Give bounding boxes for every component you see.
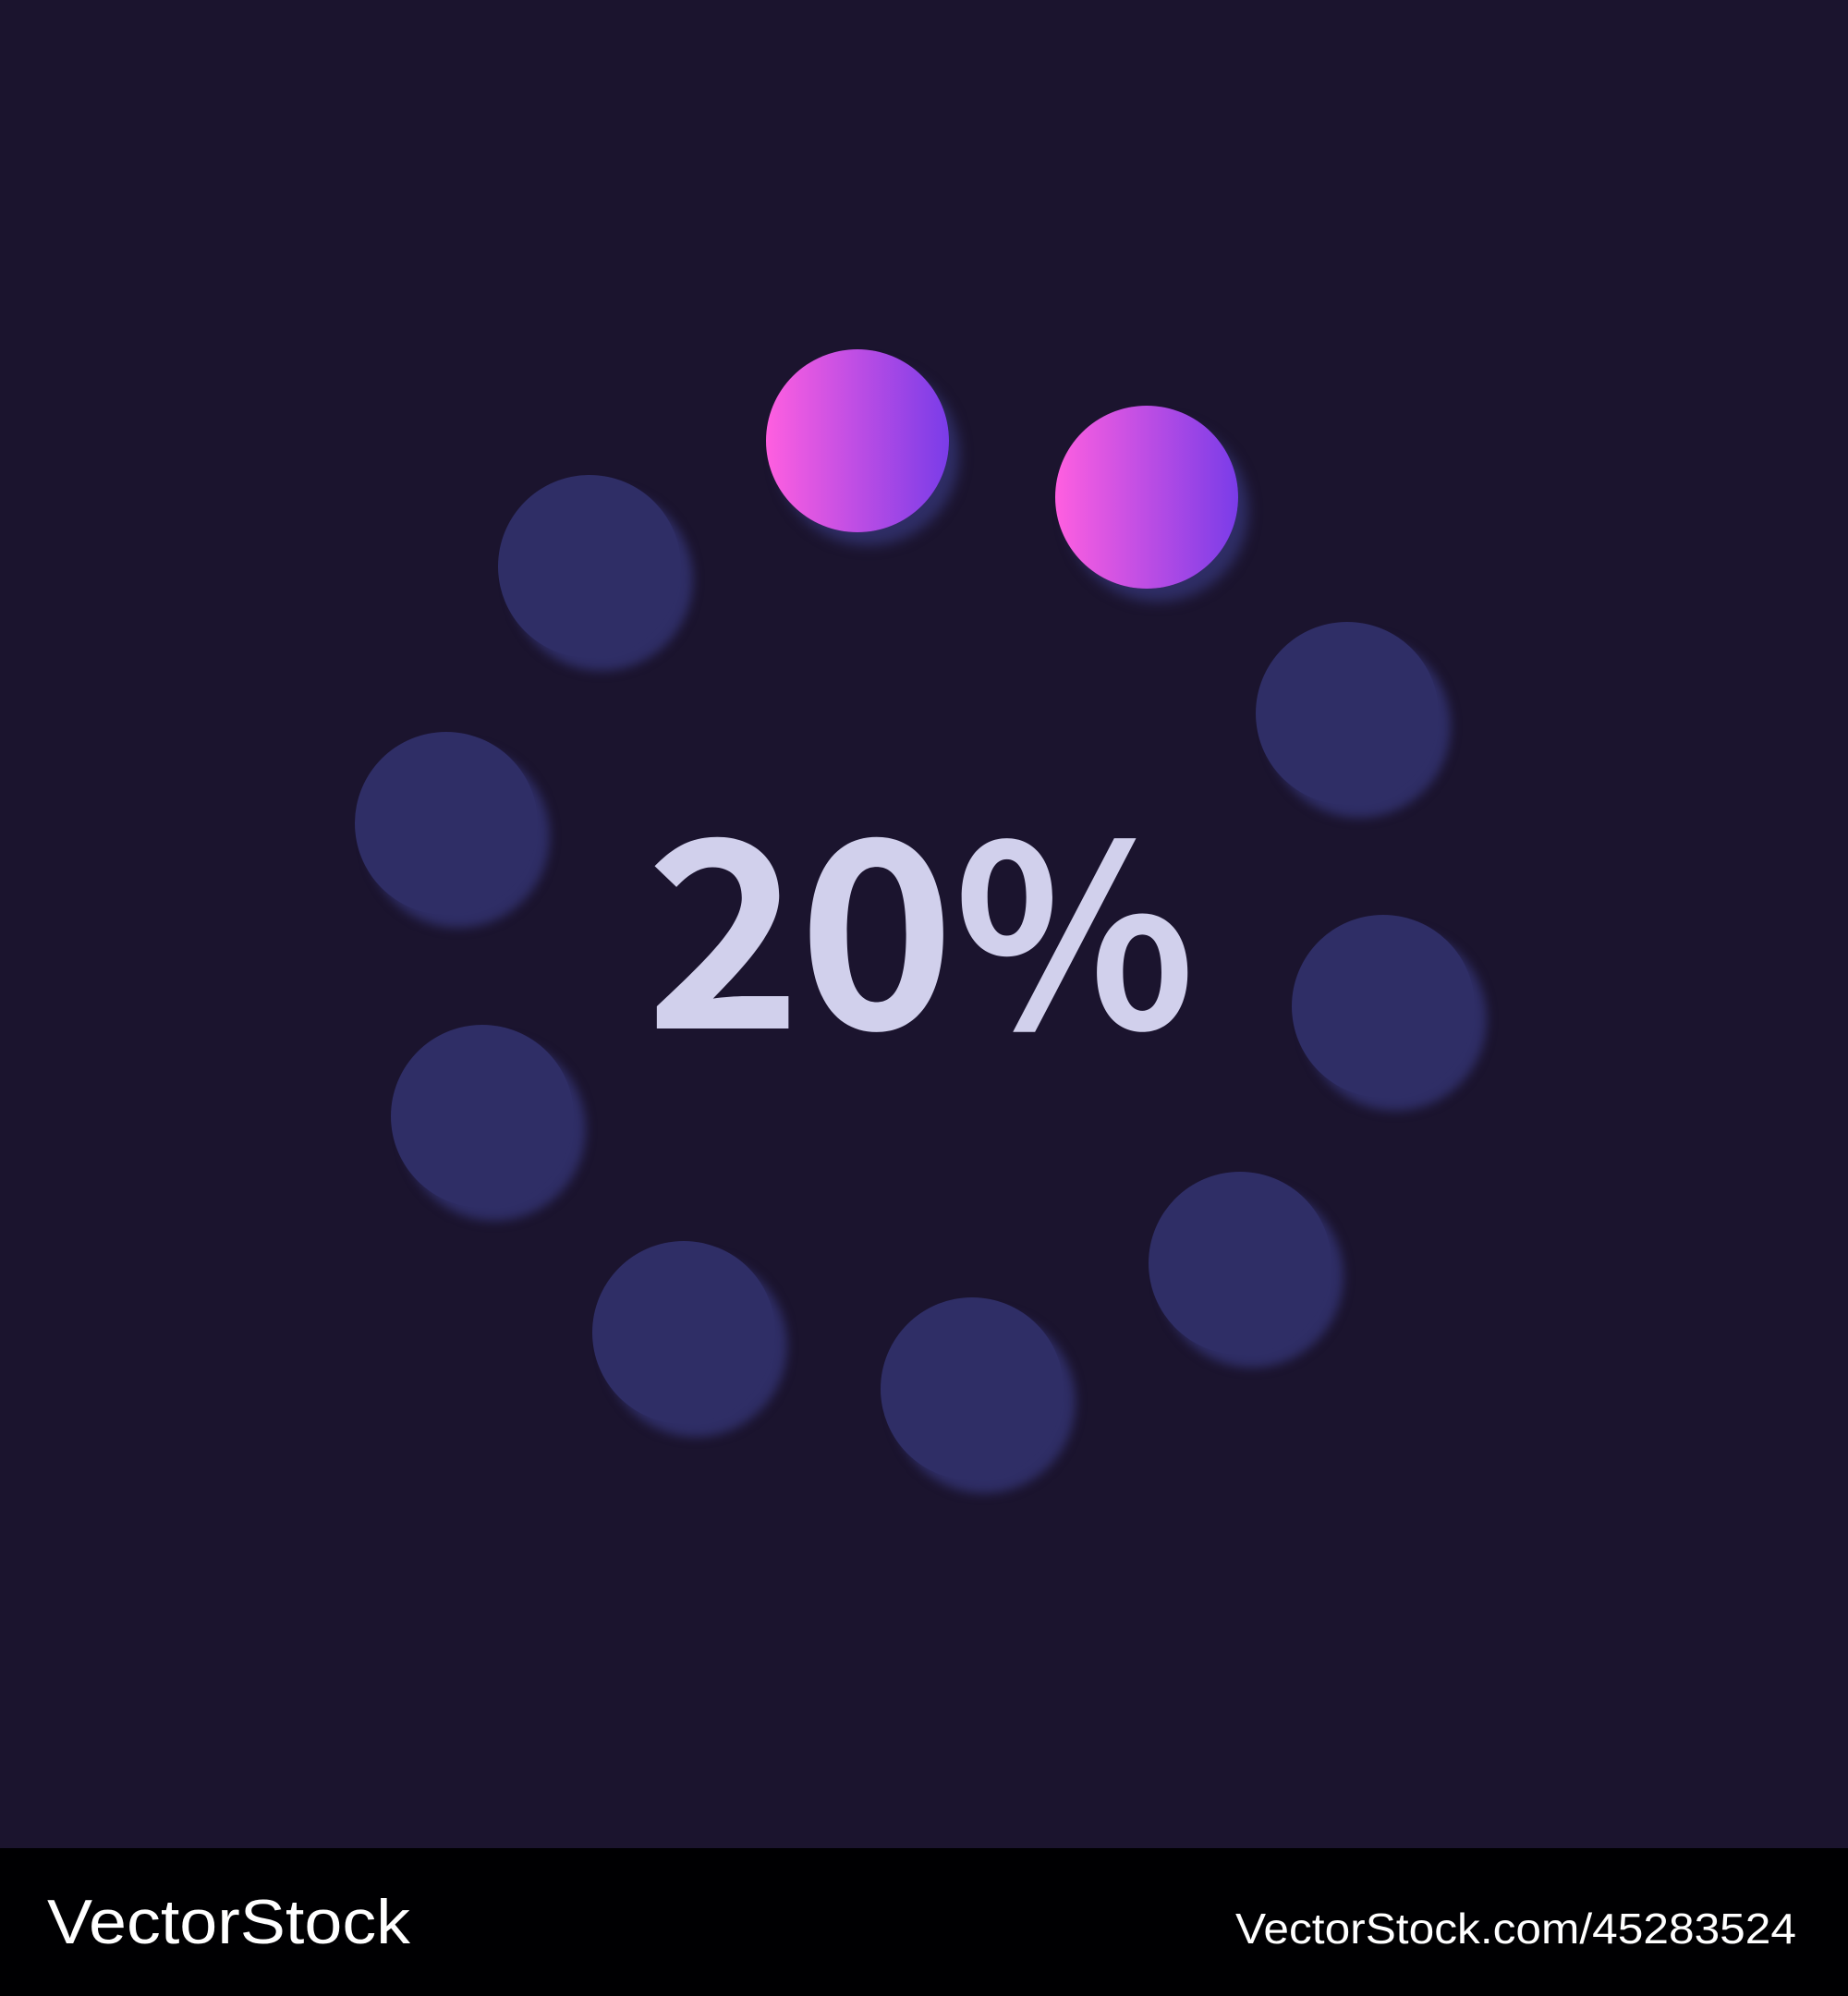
- inactive dot 9: [355, 732, 538, 915]
- active dot 1: [765, 349, 948, 532]
- footer text: [47, 1887, 1796, 1957]
- percentage value: %: [954, 736, 1196, 1101]
- inactive dot 5: [1149, 1172, 1331, 1355]
- percentage value: 2: [645, 727, 802, 1104]
- inactive dot 10: [498, 475, 681, 658]
- image reference: VectorStock.com/45283524: [1235, 1905, 1796, 1953]
- inactive dot 7: [592, 1241, 775, 1424]
- loading ring of ten dots: [355, 349, 1491, 1498]
- inactive dot 8: [391, 1025, 574, 1208]
- inactive dot 6: [881, 1297, 1064, 1480]
- footer bar: [0, 1848, 1848, 1996]
- brand name: VectorStock: [47, 1887, 411, 1957]
- active dot 2: [1055, 406, 1238, 589]
- percentage value: 0: [798, 727, 955, 1104]
- inactive dot 3: [1256, 622, 1439, 805]
- inactive dot 4: [1292, 915, 1475, 1098]
